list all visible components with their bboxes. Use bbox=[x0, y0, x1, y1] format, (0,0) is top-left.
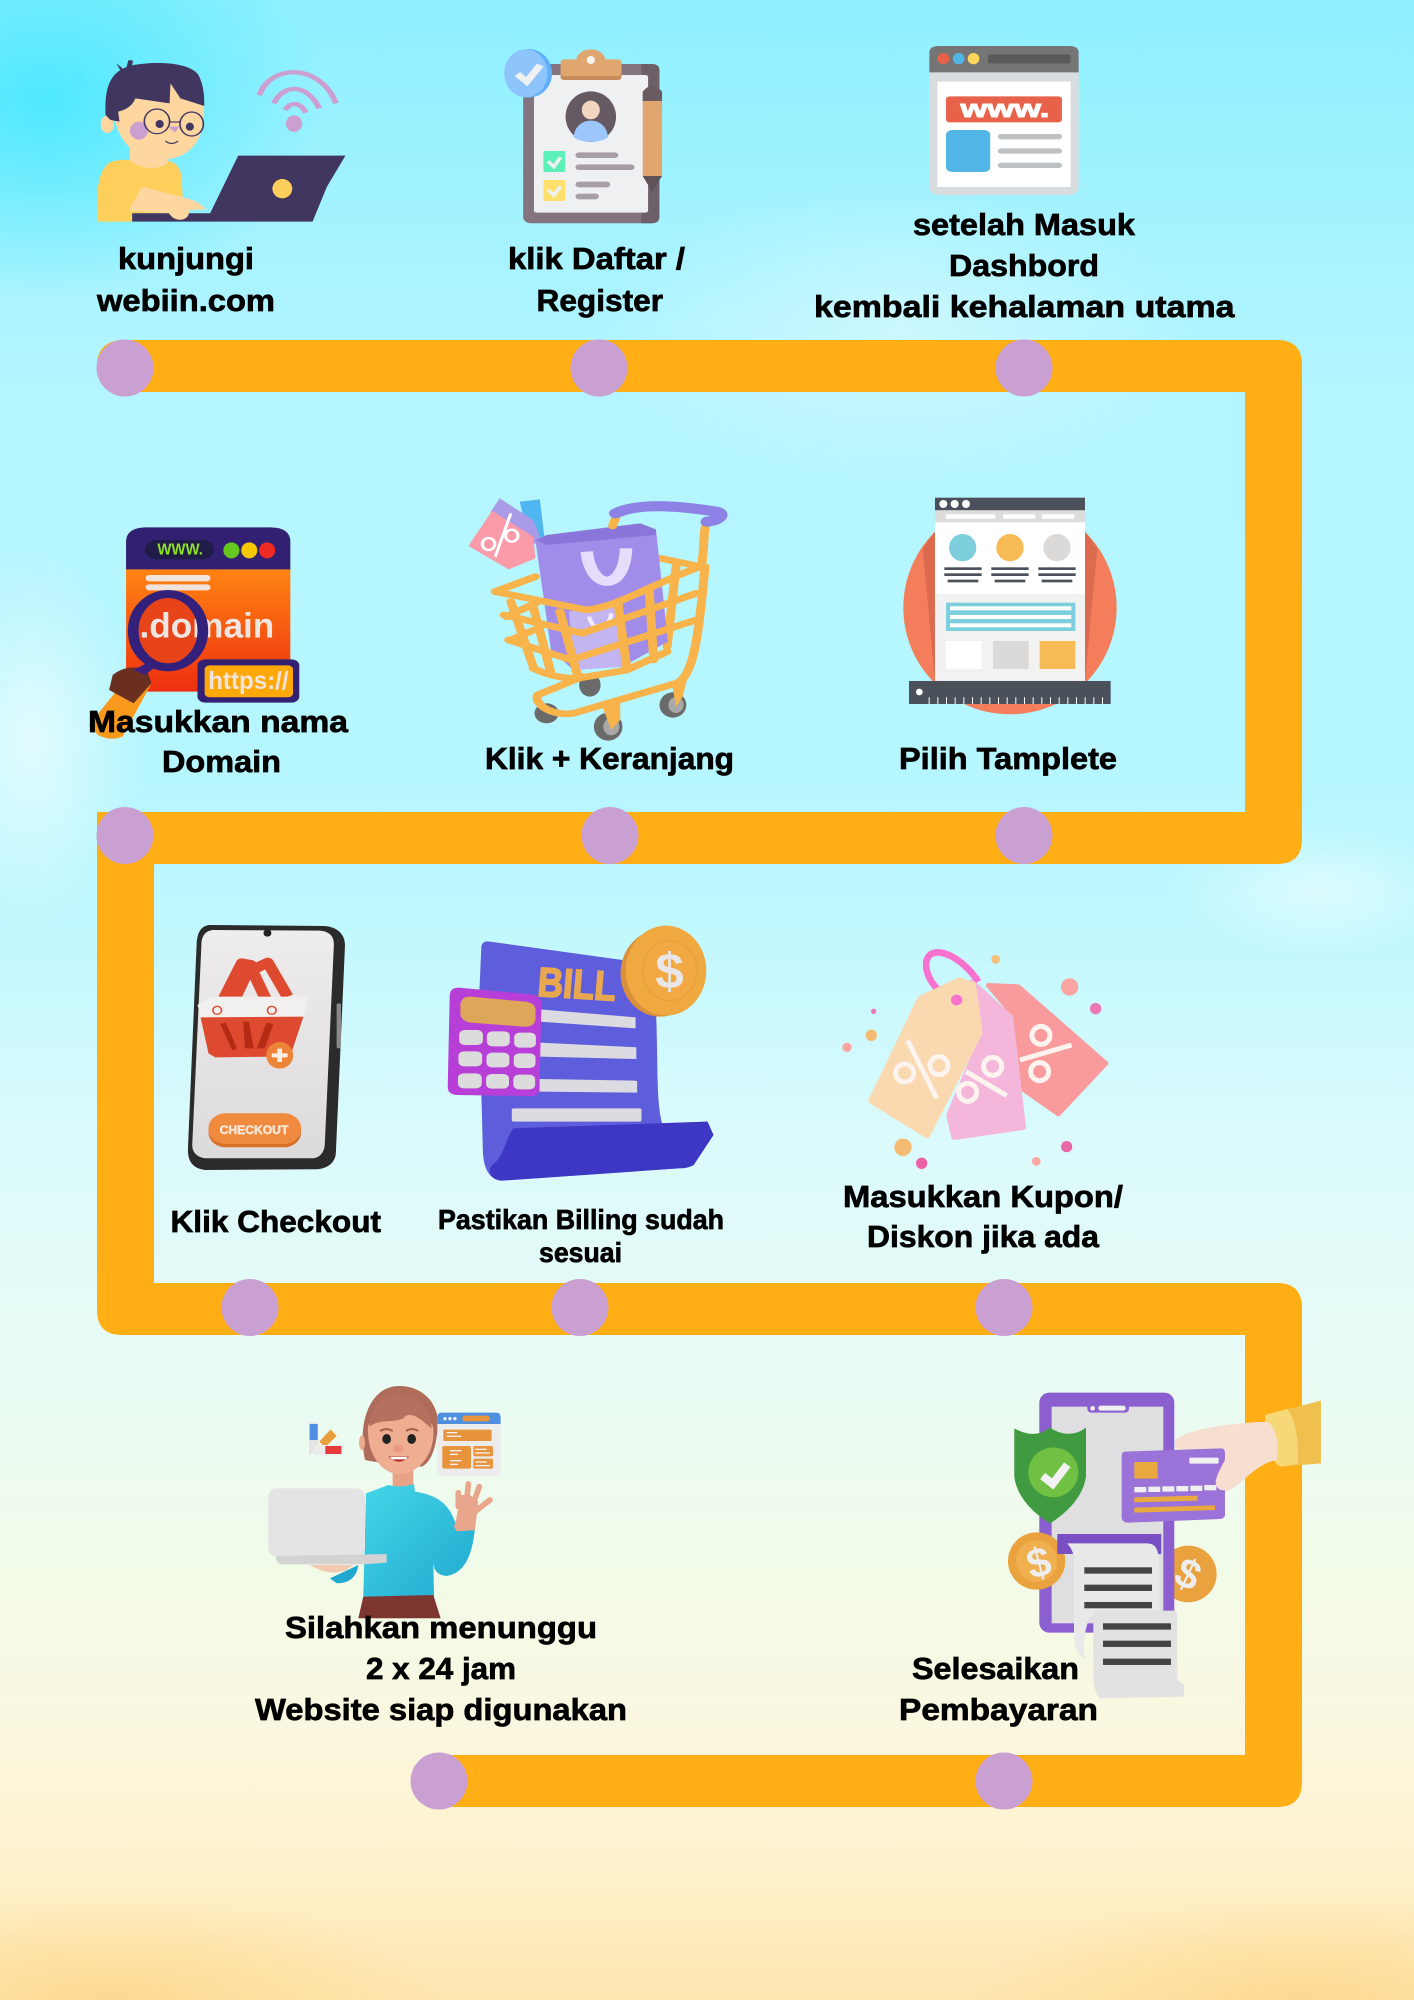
caption: setelah Masuk Dashbord kembali kehalaman utama: Dashbord bbox=[949, 248, 1099, 283]
caption: kunjungi webiin.com: kunjungi bbox=[118, 241, 254, 276]
icon: domain search window: .domain bbox=[139, 606, 274, 645]
caption: Pastikan Billing sudah sesuai: Pastikan Billing sudah bbox=[438, 1204, 724, 1235]
step 4 bbox=[88, 527, 349, 779]
icon: shopping cart with bags bbox=[468, 498, 721, 741]
icon: bill with calculator and coin bbox=[448, 926, 713, 1181]
caption: Silahkan menunggu 2 x 24 jam Website siap digunakan: Silahkan menunggu bbox=[285, 1610, 597, 1645]
caption: Masukkan Kupon/ Diskon jika ada: Masukkan Kupon/ bbox=[843, 1179, 1123, 1214]
caption: klik Daftar / Register bbox=[508, 241, 685, 318]
icon: website template page bbox=[903, 498, 1117, 714]
caption: Masukkan nama Domain bbox=[88, 704, 349, 779]
caption: Klik + Keranjang: Klik + Keranjang bbox=[485, 741, 734, 776]
caption: Selesaikan Pembayaran: Selesaikan bbox=[912, 1651, 1079, 1686]
caption: kunjungi webiin.com bbox=[96, 241, 275, 318]
icon: payment phone with shield card and receipt bbox=[1008, 1393, 1321, 1698]
caption: Masukkan nama Domain: Masukkan nama bbox=[88, 704, 349, 739]
icon: browser window www: www. bbox=[959, 96, 1049, 123]
step 5 bbox=[468, 498, 734, 776]
icon: person at laptop with wifi bbox=[97, 60, 345, 222]
caption: Masukkan Kupon/ Diskon jika ada: Diskon jika ada bbox=[867, 1219, 1100, 1254]
step 6 bbox=[899, 498, 1117, 776]
caption: klik Daftar / Register: Register bbox=[536, 283, 663, 318]
caption: Silahkan menunggu 2 x 24 jam Website siap digunakan bbox=[255, 1610, 627, 1727]
caption: klik Daftar / Register: klik Daftar / bbox=[508, 241, 685, 276]
caption: Klik Checkout: Klik Checkout bbox=[170, 1204, 381, 1239]
icon: bill with calculator and coin: $ bbox=[655, 943, 684, 999]
icon: woman with laptop waving bbox=[268, 1386, 501, 1618]
icon: browser window www bbox=[929, 46, 1079, 195]
step 3 bbox=[814, 46, 1235, 324]
icon: payment phone with shield card and receipt: $ bbox=[1021, 1537, 1056, 1588]
caption: setelah Masuk Dashbord kembali kehalaman utama: setelah Masuk bbox=[913, 207, 1136, 242]
step 7 bbox=[170, 925, 381, 1239]
icon: phone with basket and checkout: CHECKOUT bbox=[220, 1123, 288, 1137]
icon: clipboard profile form bbox=[504, 49, 662, 223]
timeline path bbox=[97, 340, 1302, 1807]
step 10 bbox=[899, 1393, 1321, 1727]
caption: Silahkan menunggu 2 x 24 jam Website siap digunakan: 2 x 24 jam bbox=[366, 1651, 516, 1686]
caption: Pilih Tamplete: Pilih Tamplete bbox=[899, 741, 1117, 776]
caption: Masukkan Kupon/ Diskon jika ada bbox=[843, 1179, 1123, 1254]
step 9 bbox=[842, 952, 1123, 1254]
icon: domain search window: WWW. bbox=[157, 541, 203, 558]
caption: Pastikan Billing sudah sesuai: sesuai bbox=[539, 1237, 622, 1268]
timeline nodes bbox=[96, 340, 1052, 1810]
caption: Silahkan menunggu 2 x 24 jam Website siap digunakan: Website siap digunakan bbox=[255, 1692, 627, 1727]
icon: payment phone with shield card and receipt: $ bbox=[1168, 1548, 1209, 1600]
caption: Pastikan Billing sudah sesuai bbox=[438, 1204, 724, 1268]
step 1 bbox=[96, 60, 345, 318]
icon: phone with basket and checkout bbox=[188, 925, 345, 1170]
icon: discount price tags bbox=[842, 952, 1106, 1169]
step 2 bbox=[504, 49, 685, 318]
caption: Selesaikan Pembayaran bbox=[899, 1651, 1098, 1727]
icon: domain search window bbox=[89, 527, 299, 739]
caption: setelah Masuk Dashbord kembali kehalaman utama: kembali kehalaman utama bbox=[814, 289, 1235, 324]
icon: domain search window: https:// bbox=[208, 667, 289, 695]
caption: setelah Masuk Dashbord kembali kehalaman utama bbox=[814, 207, 1235, 324]
caption: kunjungi webiin.com: webiin.com bbox=[96, 283, 275, 318]
icon: bill with calculator and coin: BILL bbox=[536, 959, 618, 1010]
step 11 bbox=[255, 1386, 627, 1727]
caption: Selesaikan Pembayaran: Pembayaran bbox=[899, 1692, 1098, 1727]
step 8 bbox=[438, 926, 724, 1268]
caption: Masukkan nama Domain: Domain bbox=[162, 744, 281, 779]
